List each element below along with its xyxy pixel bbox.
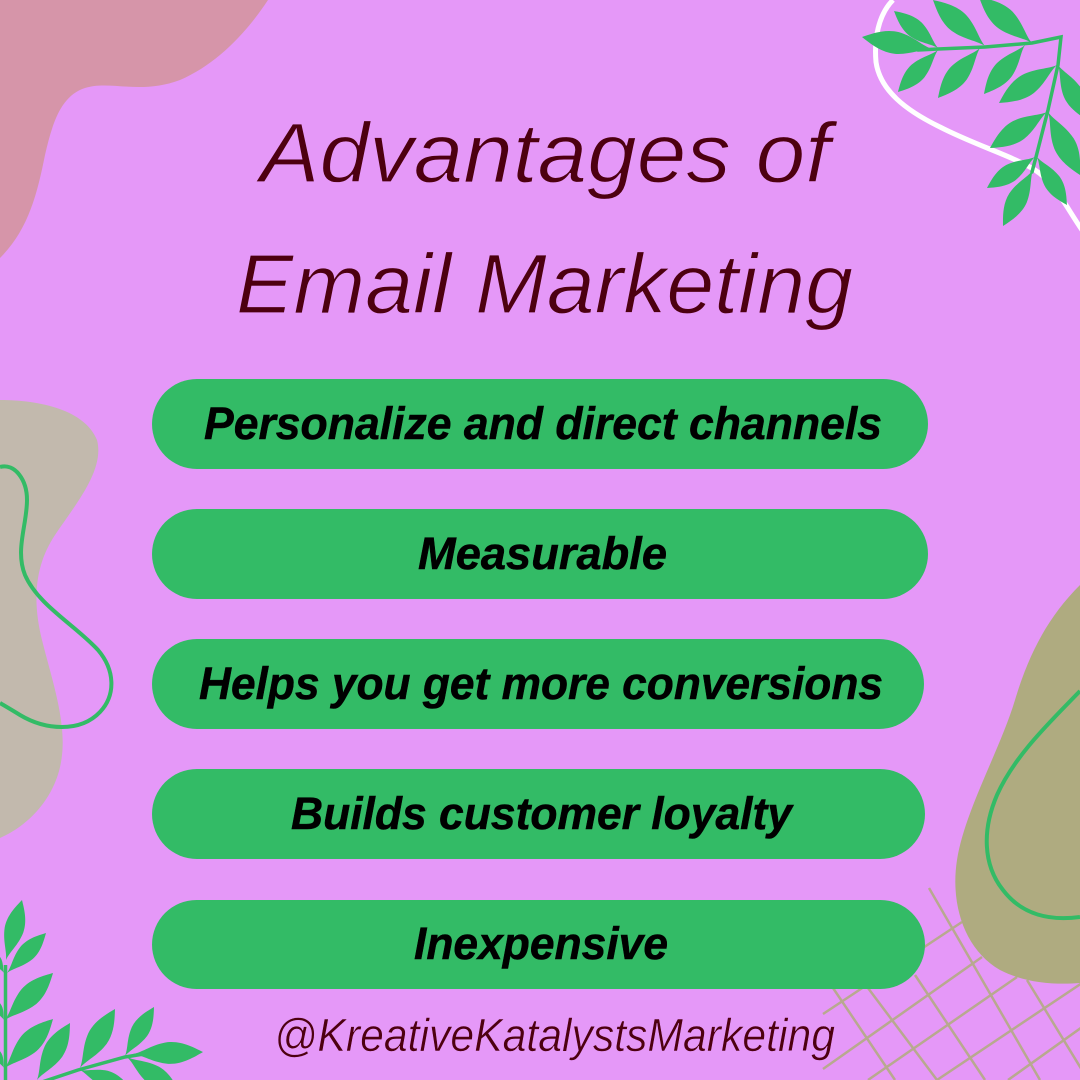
blob: top left pink: [0, 0, 268, 258]
pill: personalize and direct channels: Personalize and direct channels: [204, 398, 882, 449]
pill: personalize and direct channels: [152, 379, 928, 469]
icon: top right leaf branch: [860, 0, 1080, 231]
handle: @KreativeKatalystsMarketing: [274, 1009, 835, 1061]
title: Email Marketing: [236, 237, 853, 331]
pill: measurable: Measurable: [418, 528, 667, 579]
blob: left beige: [0, 400, 98, 838]
pill: builds customer loyalty: [152, 769, 925, 859]
blob: right olive: [955, 585, 1080, 984]
icon: bottom left horizontal leaf branch: [28, 1002, 203, 1080]
pill: inexpensive: [152, 900, 925, 989]
pill: measurable: [152, 509, 928, 599]
curve: right green line: [987, 691, 1080, 918]
pill: helps you get more conversions: Helps you get more conversions: [199, 658, 883, 709]
pill: builds customer loyalty: Builds customer loyalty: [291, 788, 794, 839]
pill: inexpensive: Inexpensive: [414, 918, 668, 969]
icon: bottom left vertical leaf branch: [0, 897, 61, 1080]
title: Advantages of: [255, 106, 838, 200]
curve: top right white line: [876, 0, 1080, 230]
pill: helps you get more conversions: [152, 639, 924, 729]
title: [236, 106, 853, 331]
grid lines: bottom right: [823, 888, 1080, 1080]
curve: left green line: [0, 466, 111, 727]
